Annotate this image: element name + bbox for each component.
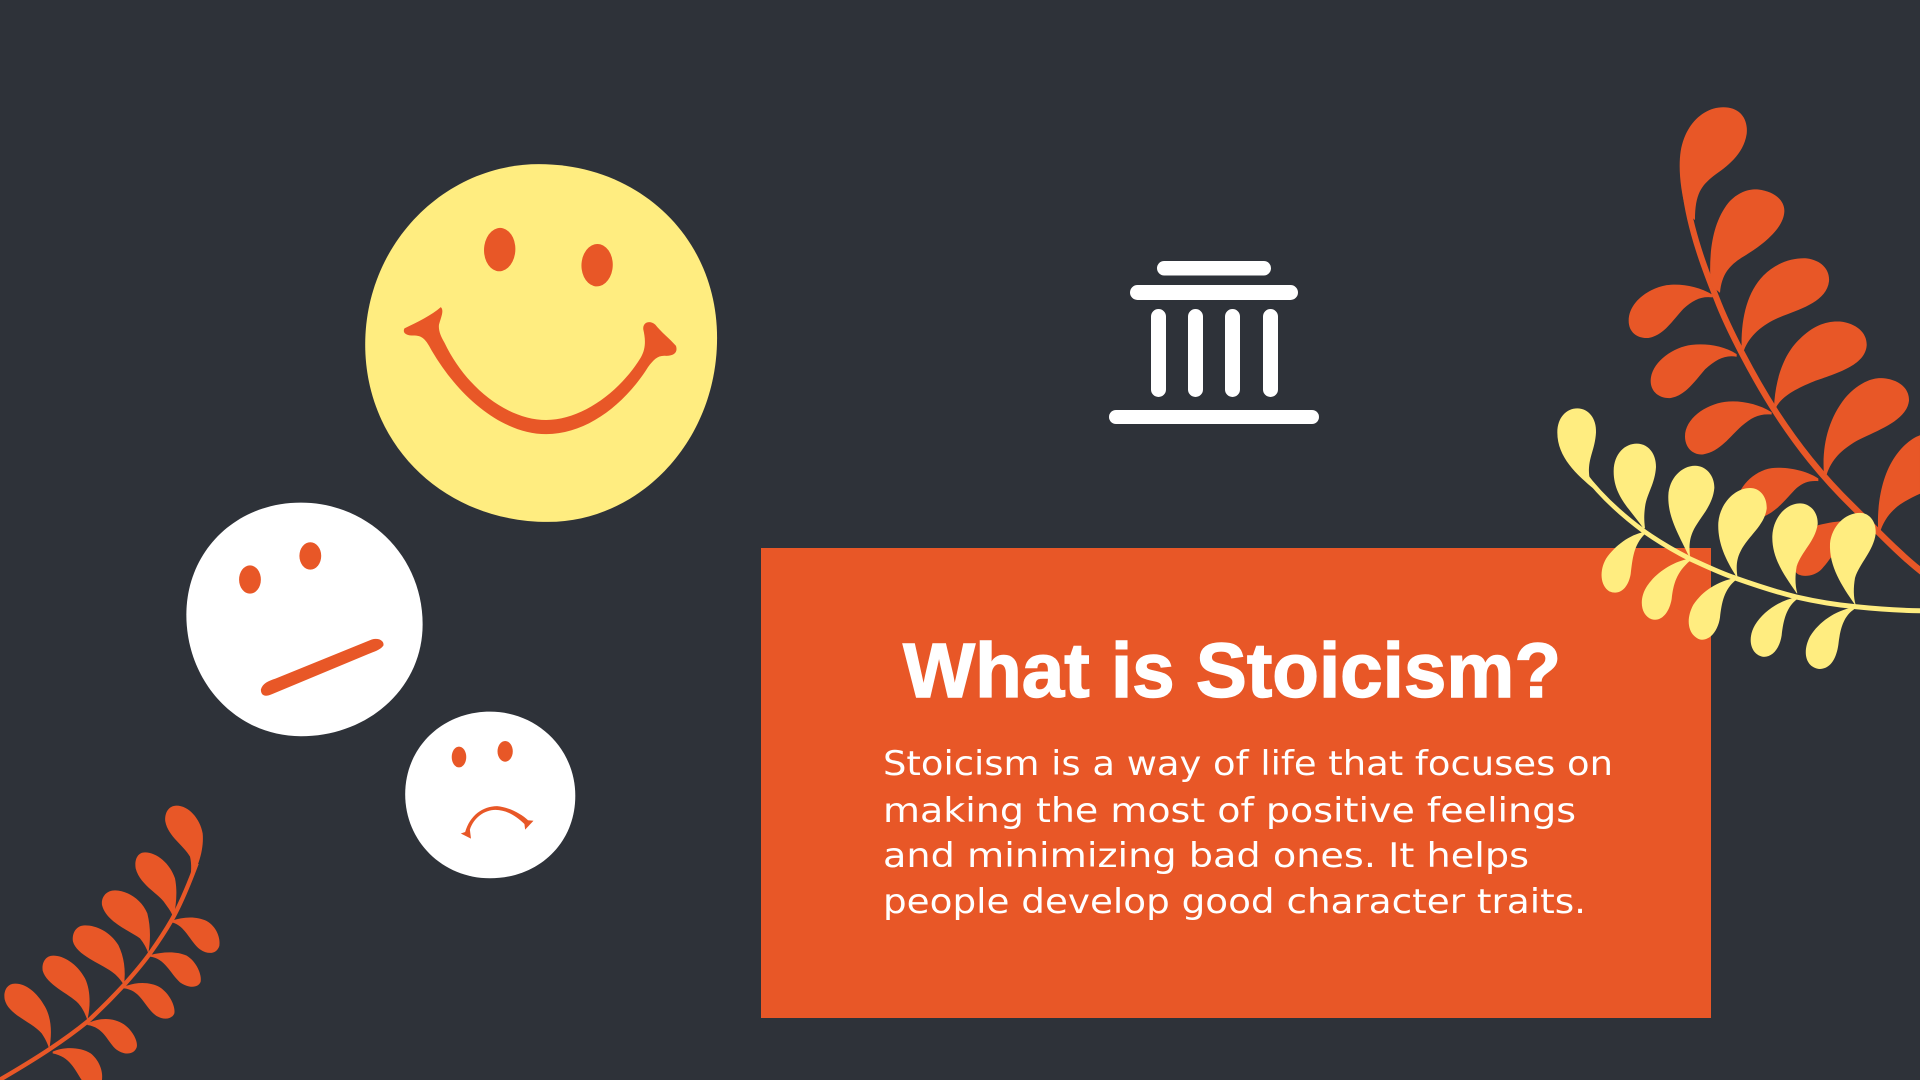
decoration: yellow branch top right [1557, 408, 1920, 669]
heading: What is Stoicism? [903, 628, 1561, 714]
decoration: orange branch bottom left [0, 806, 220, 1080]
body text: Stoicism is a way of life that focuses on [883, 744, 1613, 783]
body text [883, 744, 1613, 921]
icon: greek temple columns [1109, 261, 1319, 424]
body text: people develop good character traits. [883, 882, 1586, 921]
icon: happy yellow face [365, 164, 717, 522]
decoration: orange branch top right [1629, 107, 1920, 576]
panel: what is stoicism [761, 548, 1711, 1018]
body text: making the most of positive feelings [883, 791, 1576, 830]
body text: and minimizing bad ones. It helps [883, 836, 1529, 875]
icon: sad white face [405, 712, 575, 878]
icon: neutral white face [186, 503, 423, 736]
